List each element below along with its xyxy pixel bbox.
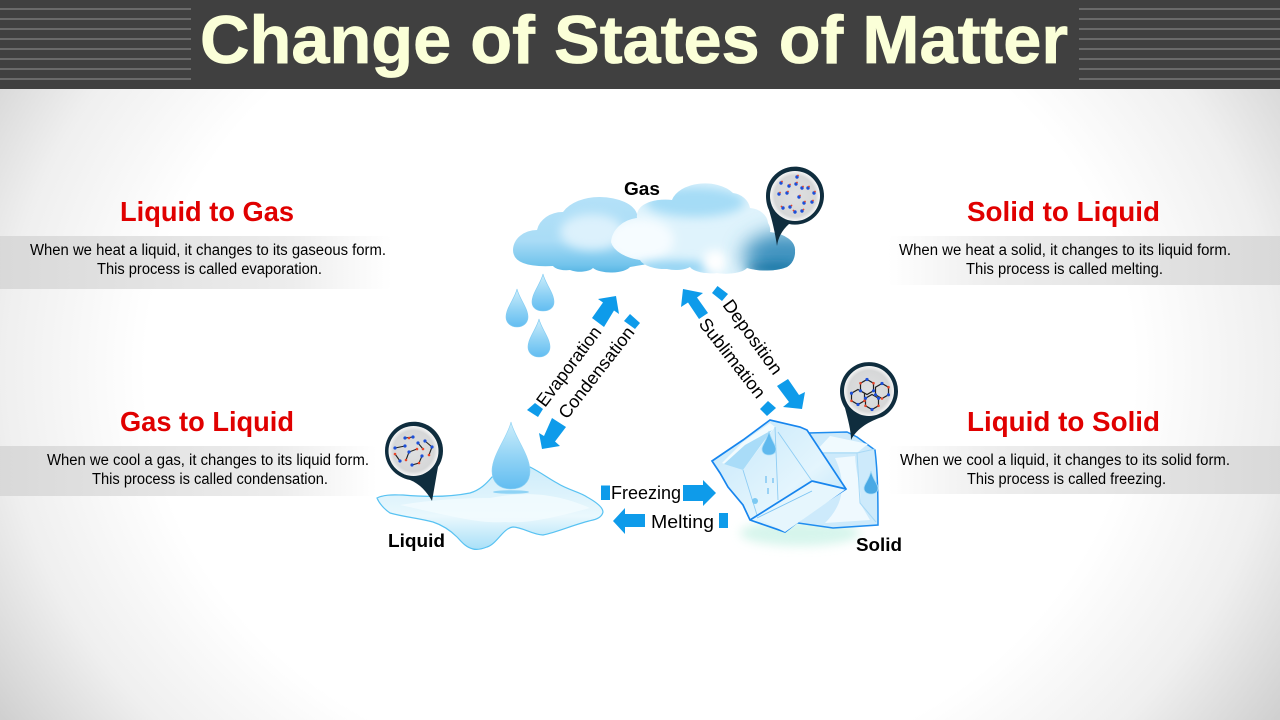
arrow: freezing [601,480,716,506]
text: liquid to gas: This process is called evaporation. [97,261,322,278]
arrow: deposition: Deposition [719,296,787,379]
arrow: sublimation: Sublimation [695,314,770,402]
title: Change of States of Matter [200,2,1068,78]
text: liquid to solid [900,452,1230,488]
text: solid to liquid: When we heat a solid, it changes to its liquid form. [899,242,1231,259]
panel: gas to liquid [0,406,377,496]
text: gas to liquid [47,452,369,488]
arrow: melting [613,508,728,534]
heading: liquid to solid: Liquid to Solid [967,406,1160,437]
heading: gas to liquid: Gas to Liquid [120,406,294,437]
arrow: condensation: Condensation [554,323,638,422]
label: liquid: Liquid [388,531,445,551]
text: gas to liquid: This process is called condensation. [92,471,328,488]
text: gas to liquid: When we cool a gas, it changes to its liquid form. [47,452,369,469]
arrow: deposition [712,286,805,409]
panel: solid to liquid [888,196,1280,285]
pin: gas molecules [766,167,824,246]
pin: solid molecules [840,362,898,440]
icon: cloud [513,183,796,274]
heading: solid to liquid: Solid to Liquid [967,196,1160,227]
icon: large water drop [492,422,530,489]
panel: liquid to solid [888,406,1280,494]
text: liquid to gas: When we heat a liquid, it changes to its gaseous form. [30,242,386,259]
title banner [0,0,1280,89]
text: solid to liquid [899,242,1231,278]
icon: puddle [377,422,603,549]
heading: liquid to gas: Liquid to Gas [120,196,294,227]
panel: liquid to gas [0,196,392,289]
arrow: condensation [539,314,640,449]
arrow: evaporation: Evaporation [532,323,605,410]
icon: ice cubes [712,420,878,546]
arrow: evaporation [527,296,619,417]
arrow: melting: Melting [651,512,714,532]
text: liquid to gas [30,242,386,278]
arrow: freezing: Freezing [611,483,681,503]
text: liquid to solid: This process is called freezing. [967,471,1166,488]
text: liquid to solid: When we cool a liquid, it changes to its solid form. [900,452,1230,469]
icon: rain drops [506,274,554,357]
text: solid to liquid: This process is called melting. [966,261,1163,278]
label: solid: Solid [856,535,902,555]
label: gas: Gas [624,179,660,199]
pin: liquid molecules [385,422,443,501]
arrow: sublimation [681,289,776,416]
